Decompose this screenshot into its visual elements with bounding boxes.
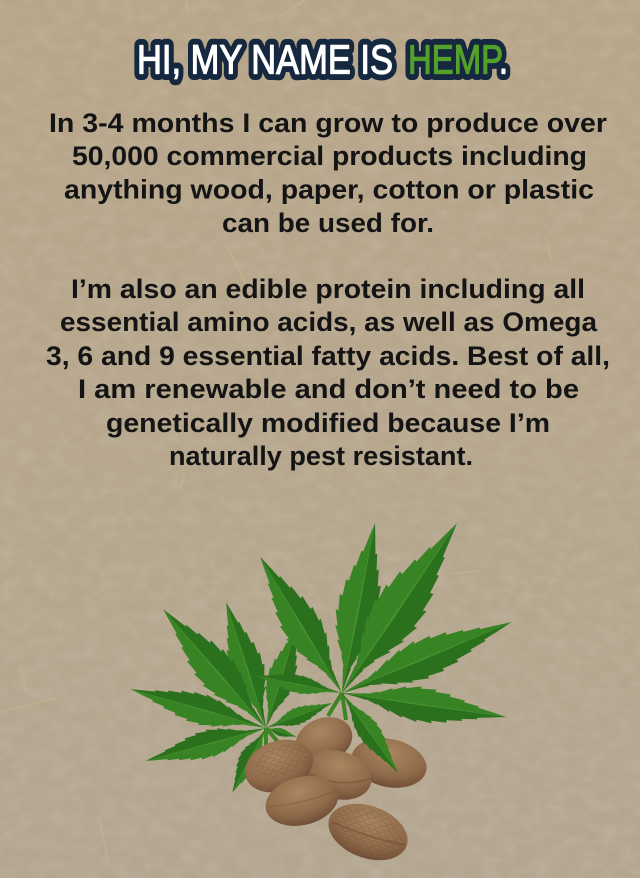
small hemp leaf bbox=[126, 596, 336, 798]
text block: what hemp can produce: can be used for. bbox=[222, 208, 434, 238]
illustration: hemp leaves and seeds bbox=[126, 509, 520, 870]
text block: what hemp can produce: In 3-4 months I can grow to produce over bbox=[49, 108, 608, 138]
text block: nutrition and renewability: I’m also an edible protein including all bbox=[71, 274, 585, 304]
seed: lower left bbox=[260, 769, 344, 833]
text block: nutrition and renewability: genetically modified because I’m bbox=[106, 408, 550, 438]
text block: what hemp can produce: 50,000 commercial products including bbox=[72, 141, 587, 171]
text block: what hemp can produce bbox=[49, 108, 608, 238]
title: HEMP. bbox=[408, 36, 508, 82]
large hemp leaf bbox=[243, 509, 520, 735]
text block: nutrition and renewability: I am renewable and don’t need to be bbox=[78, 374, 579, 404]
seed: middle bbox=[299, 743, 377, 807]
title: HEMP. bbox=[408, 36, 508, 82]
seed: bottom bbox=[321, 794, 415, 870]
leaflet over seed bbox=[332, 686, 408, 780]
text block: nutrition and renewability: essential amino acids, as well as Omega bbox=[60, 307, 598, 337]
seed: top bbox=[289, 709, 359, 771]
title: HI, MY NAME IS bbox=[137, 36, 393, 82]
seed: right bbox=[347, 732, 431, 794]
text block: nutrition and renewability: 3, 6 and 9 essential fatty acids. Best of all, bbox=[46, 341, 610, 371]
title: HI, MY NAME IS bbox=[137, 36, 393, 82]
text block: what hemp can produce: anything wood, paper, cotton or plastic bbox=[64, 174, 594, 204]
text block: nutrition and renewability bbox=[46, 274, 610, 471]
seed: left bbox=[238, 731, 320, 801]
text block: nutrition and renewability: naturally pest resistant. bbox=[169, 441, 473, 471]
